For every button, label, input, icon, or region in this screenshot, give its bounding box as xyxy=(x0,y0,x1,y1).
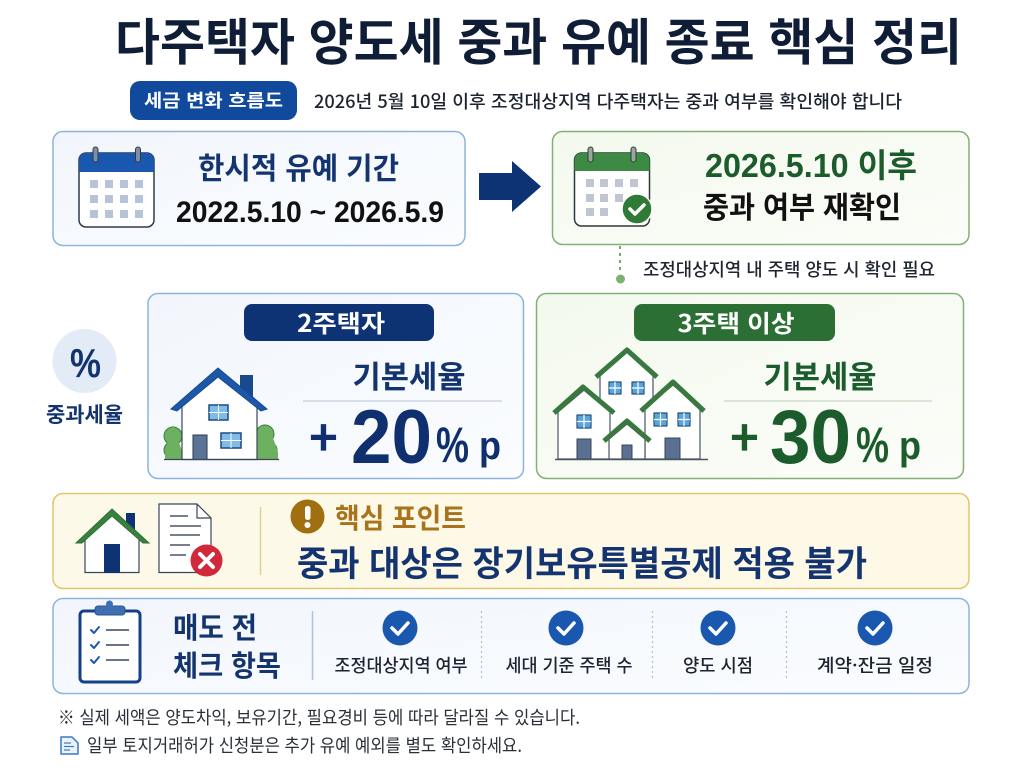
connector dot xyxy=(616,246,625,284)
rate: +30%p: + xyxy=(730,399,759,471)
flow label pill: 세금 변화 흐름도 xyxy=(144,87,283,113)
key point heading: 핵심 포인트 xyxy=(335,497,466,537)
date heading: 2026.5.10 이후 xyxy=(705,147,917,184)
rate: +20%p: % xyxy=(436,417,469,473)
panel: pre-sale checklist xyxy=(53,598,969,694)
rate: +30%p: p xyxy=(899,424,921,468)
icon: group of houses xyxy=(554,350,708,460)
rate: +20%p: + xyxy=(309,399,338,471)
rate: +20%p xyxy=(309,395,501,480)
icon: house xyxy=(76,509,149,573)
icon: document with X xyxy=(159,504,222,576)
checklist heading: 체크 항목 xyxy=(173,643,281,685)
connector note: 조정대상지역 내 주택 양도 시 확인 필요 xyxy=(643,256,935,282)
checklist heading xyxy=(173,605,281,685)
panel: three or more homes xyxy=(536,294,964,480)
subtitle: 2026년 5월 10일 이후 조정대상지역 다주택자는 중과 여부를 확인해야 합니다 xyxy=(314,88,902,114)
icon: green calendar with check xyxy=(574,147,652,226)
rate: +20%p: p xyxy=(479,424,501,468)
icon: percent circle: % xyxy=(70,340,101,386)
rate: +30%p: % xyxy=(856,417,889,473)
arrow xyxy=(479,161,541,212)
icon: blue calendar xyxy=(79,147,154,227)
panel: after 2026.5.10 xyxy=(552,132,969,244)
footnote 1: ※ 실제 세액은 양도차익, 보유기간, 필요경비 등에 따라 달라질 수 있습니다. xyxy=(58,704,580,730)
icon: single house with trees xyxy=(164,368,279,460)
icon: clipboard xyxy=(80,600,140,682)
badge: 2 homes: 2주택자 xyxy=(297,304,385,339)
checklist heading: 매도 전 xyxy=(173,605,257,647)
check item 3: 양도 시점 xyxy=(683,652,753,678)
key point message: 중과 대상은 장기보유특별공제 적용 불가 xyxy=(297,536,867,587)
check item 2: 세대 기준 주택 수 xyxy=(506,652,632,678)
rate: +30%p: 30 xyxy=(770,395,851,480)
footnote 2: 일부 토지거래허가 신청분은 추가 유예 예외를 별도 확인하세요. xyxy=(87,732,522,758)
check item 3 xyxy=(683,610,753,678)
base rate label: 기본세율 xyxy=(764,352,876,397)
check item 1 xyxy=(334,610,468,678)
date range: 2022.5.10 ~ 2026.5.9 xyxy=(176,196,444,229)
check item 2 xyxy=(506,610,632,678)
panel: key point xyxy=(53,494,969,588)
flow label pill xyxy=(130,81,297,120)
panel: temporary grace period xyxy=(53,132,465,246)
check item 4: 계약·잔금 일정 xyxy=(817,652,933,678)
panel heading: 한시적 유예 기간 xyxy=(198,144,399,188)
heavy tax label: 중과세율 xyxy=(46,399,123,429)
icon: document note xyxy=(61,737,78,754)
check item 1: 조정대상지역 여부 xyxy=(334,652,468,678)
recheck text: 중과 여부 재확인 xyxy=(703,183,901,227)
badge: 3+ homes: 3주택 이상 xyxy=(678,304,794,339)
rate: +30%p xyxy=(730,395,921,480)
panel: two-home owners xyxy=(148,294,524,480)
rate: +20%p: 20 xyxy=(351,395,432,480)
title: 다주택자 양도세 중과 유예 종료 핵심 정리 xyxy=(115,3,962,75)
icon: exclamation xyxy=(290,500,324,534)
badge: 3+ homes xyxy=(634,304,835,341)
icon: percent circle xyxy=(52,329,116,393)
badge: 2 homes xyxy=(244,304,434,341)
check item 4 xyxy=(817,610,933,678)
base rate label: 기본세율 xyxy=(352,352,466,397)
